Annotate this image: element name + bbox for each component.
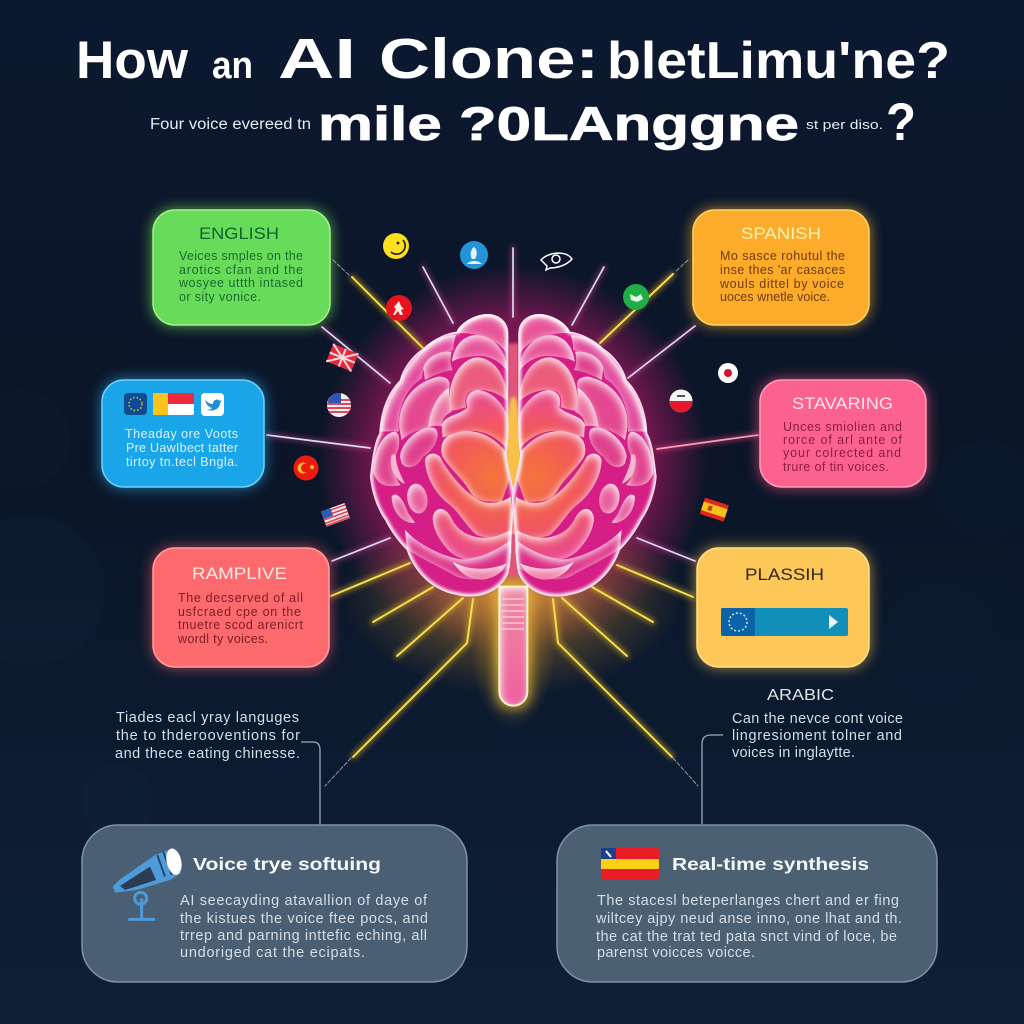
text: blue body: Pre UawIbect tatter	[126, 441, 238, 455]
text: voice software body	[180, 893, 428, 961]
subtitle: mile ?0LAnggne	[318, 97, 799, 150]
icon: red runner	[386, 295, 412, 321]
icon: red crescent circle	[294, 456, 318, 480]
rays: white connectors	[267, 248, 758, 562]
panel: real-time synthesis	[557, 825, 937, 982]
icon: red white circle	[670, 390, 692, 412]
subtitle: Four voice evereed tn	[150, 116, 311, 133]
heading: voice software: Voice trye softuing	[193, 854, 381, 874]
panel: stavaring	[760, 380, 926, 487]
title: Clone:	[379, 27, 599, 91]
text: english body	[178, 249, 303, 304]
heading: plassih: PLASSIH	[745, 565, 824, 584]
text: ramplive body: tnuetre scod arenicrt	[178, 618, 304, 632]
text: synthesis body: wiltcey ajpy neud anse inno, one lhat and th.	[595, 911, 902, 927]
brain core glow	[505, 343, 522, 577]
text: ramplive body: usfcraed cpe on the	[178, 605, 301, 619]
icon: eye	[541, 253, 572, 270]
text: left note	[115, 710, 300, 762]
text: synthesis body: parenst voicces voicce.	[597, 945, 755, 961]
title: bletLimu'ne?	[607, 32, 950, 90]
icon: yellow red flag	[153, 393, 194, 415]
subtitle: st per diso.	[806, 117, 883, 132]
brain stem	[495, 583, 532, 710]
text: blue body	[125, 427, 238, 469]
icon: EU flag	[124, 393, 147, 415]
text: ramplive body	[177, 591, 304, 646]
title	[76, 27, 950, 91]
right connector	[702, 735, 723, 824]
heading: ramplive: RAMPLIVE	[192, 564, 287, 583]
panel: ramplive	[153, 548, 329, 667]
panel: spanish	[693, 210, 869, 325]
icon: Japan circle	[718, 363, 738, 383]
panel: voice software	[82, 825, 467, 982]
text: english body: Veices smples on the	[179, 249, 303, 263]
text: english body: arotics cfan and the	[179, 263, 303, 277]
text: synthesis body: the cat the trat ted pata snct vind of loce, be	[596, 929, 897, 945]
heading: stavaring: STAVARING	[792, 394, 893, 413]
icon: green circle	[623, 284, 649, 310]
title: an	[212, 45, 253, 87]
text: left note: Tiades eacl yray languges	[116, 710, 299, 726]
text: voice software body: AI seecayding atavallion of daye of	[180, 893, 428, 909]
text: stavaring body	[783, 420, 903, 474]
text: blue body: Theaday ore Voots	[125, 427, 238, 441]
icon: microphone	[113, 847, 184, 919]
progress bar	[721, 608, 848, 636]
left hemisphere	[370, 314, 515, 597]
heading: arabic: ARABIC	[767, 687, 834, 704]
heading: real-time synthesis: Real-time synthesis	[672, 854, 869, 874]
text: left note: and thece eating chinesse.	[115, 746, 300, 762]
heading: spanish: SPANISH	[741, 224, 821, 243]
icon: UK flag	[326, 344, 358, 372]
text: ramplive body: The decserved of all	[178, 591, 303, 605]
icon: smiley	[383, 233, 409, 259]
text: spanish body: uoces wnetle voice.	[720, 290, 830, 304]
text: spanish body: inse thes 'ar casaces	[720, 263, 845, 277]
icon: US round flag	[327, 393, 351, 417]
text: stavaring body: rorce of arl ante of	[783, 433, 903, 447]
title: How	[76, 31, 189, 90]
text: spanish body: wouls dittel by voice	[719, 277, 844, 291]
panel: plassih	[697, 548, 869, 667]
text: synthesis body	[595, 893, 902, 961]
panel: english	[153, 210, 330, 325]
icon: Spain flag	[700, 498, 729, 522]
subtitle: ?	[886, 93, 916, 152]
title: AI	[278, 27, 356, 91]
text: synthesis body: The stacesl beteperlanges chert and er fing	[597, 893, 899, 909]
text: left note: the to thderooventions for	[116, 728, 300, 744]
text: right note	[732, 711, 903, 761]
subtitle	[150, 93, 916, 152]
text: spanish body: Mo sasce rohutul the	[720, 249, 845, 263]
brain halo glow	[318, 265, 708, 730]
text: voice software body: undoriged cat the ecipats.	[180, 945, 365, 961]
text: english body: or sity vonice.	[179, 290, 261, 304]
brain	[370, 314, 657, 710]
icon: striped flag	[601, 848, 659, 879]
text: blue body: tirtoy tn.tecl Bngla.	[126, 455, 238, 469]
text: right note: Can the nevce cont voice	[732, 711, 903, 727]
text: stavaring body: trure of tin voices.	[783, 460, 889, 474]
icon: bird badge	[201, 393, 224, 416]
icon: US flag	[321, 503, 350, 527]
text: voice software body: trrep and parning inttefic eching, all	[180, 928, 427, 944]
text: right note: lingresioment tolner and	[732, 728, 902, 744]
text: stavaring body: Unces smiolien and	[783, 420, 902, 434]
text: voice software body: the kistues the voice ftee pocs, and	[180, 911, 428, 927]
text: english body: wosyee uttth intased	[178, 276, 303, 290]
icon: blue voice circle	[460, 241, 488, 269]
heading: english: ENGLISH	[199, 224, 279, 243]
text: spanish body	[719, 249, 845, 304]
text: right note: voices in inglaytte.	[732, 745, 855, 761]
text: stavaring body: your colrected and	[783, 446, 901, 460]
panel: blue languages	[102, 380, 264, 487]
left connector	[301, 742, 320, 825]
text: ramplive body: wordl ty voices.	[177, 632, 268, 646]
rays: yellow connectors	[325, 260, 698, 786]
right hemisphere	[512, 314, 657, 597]
